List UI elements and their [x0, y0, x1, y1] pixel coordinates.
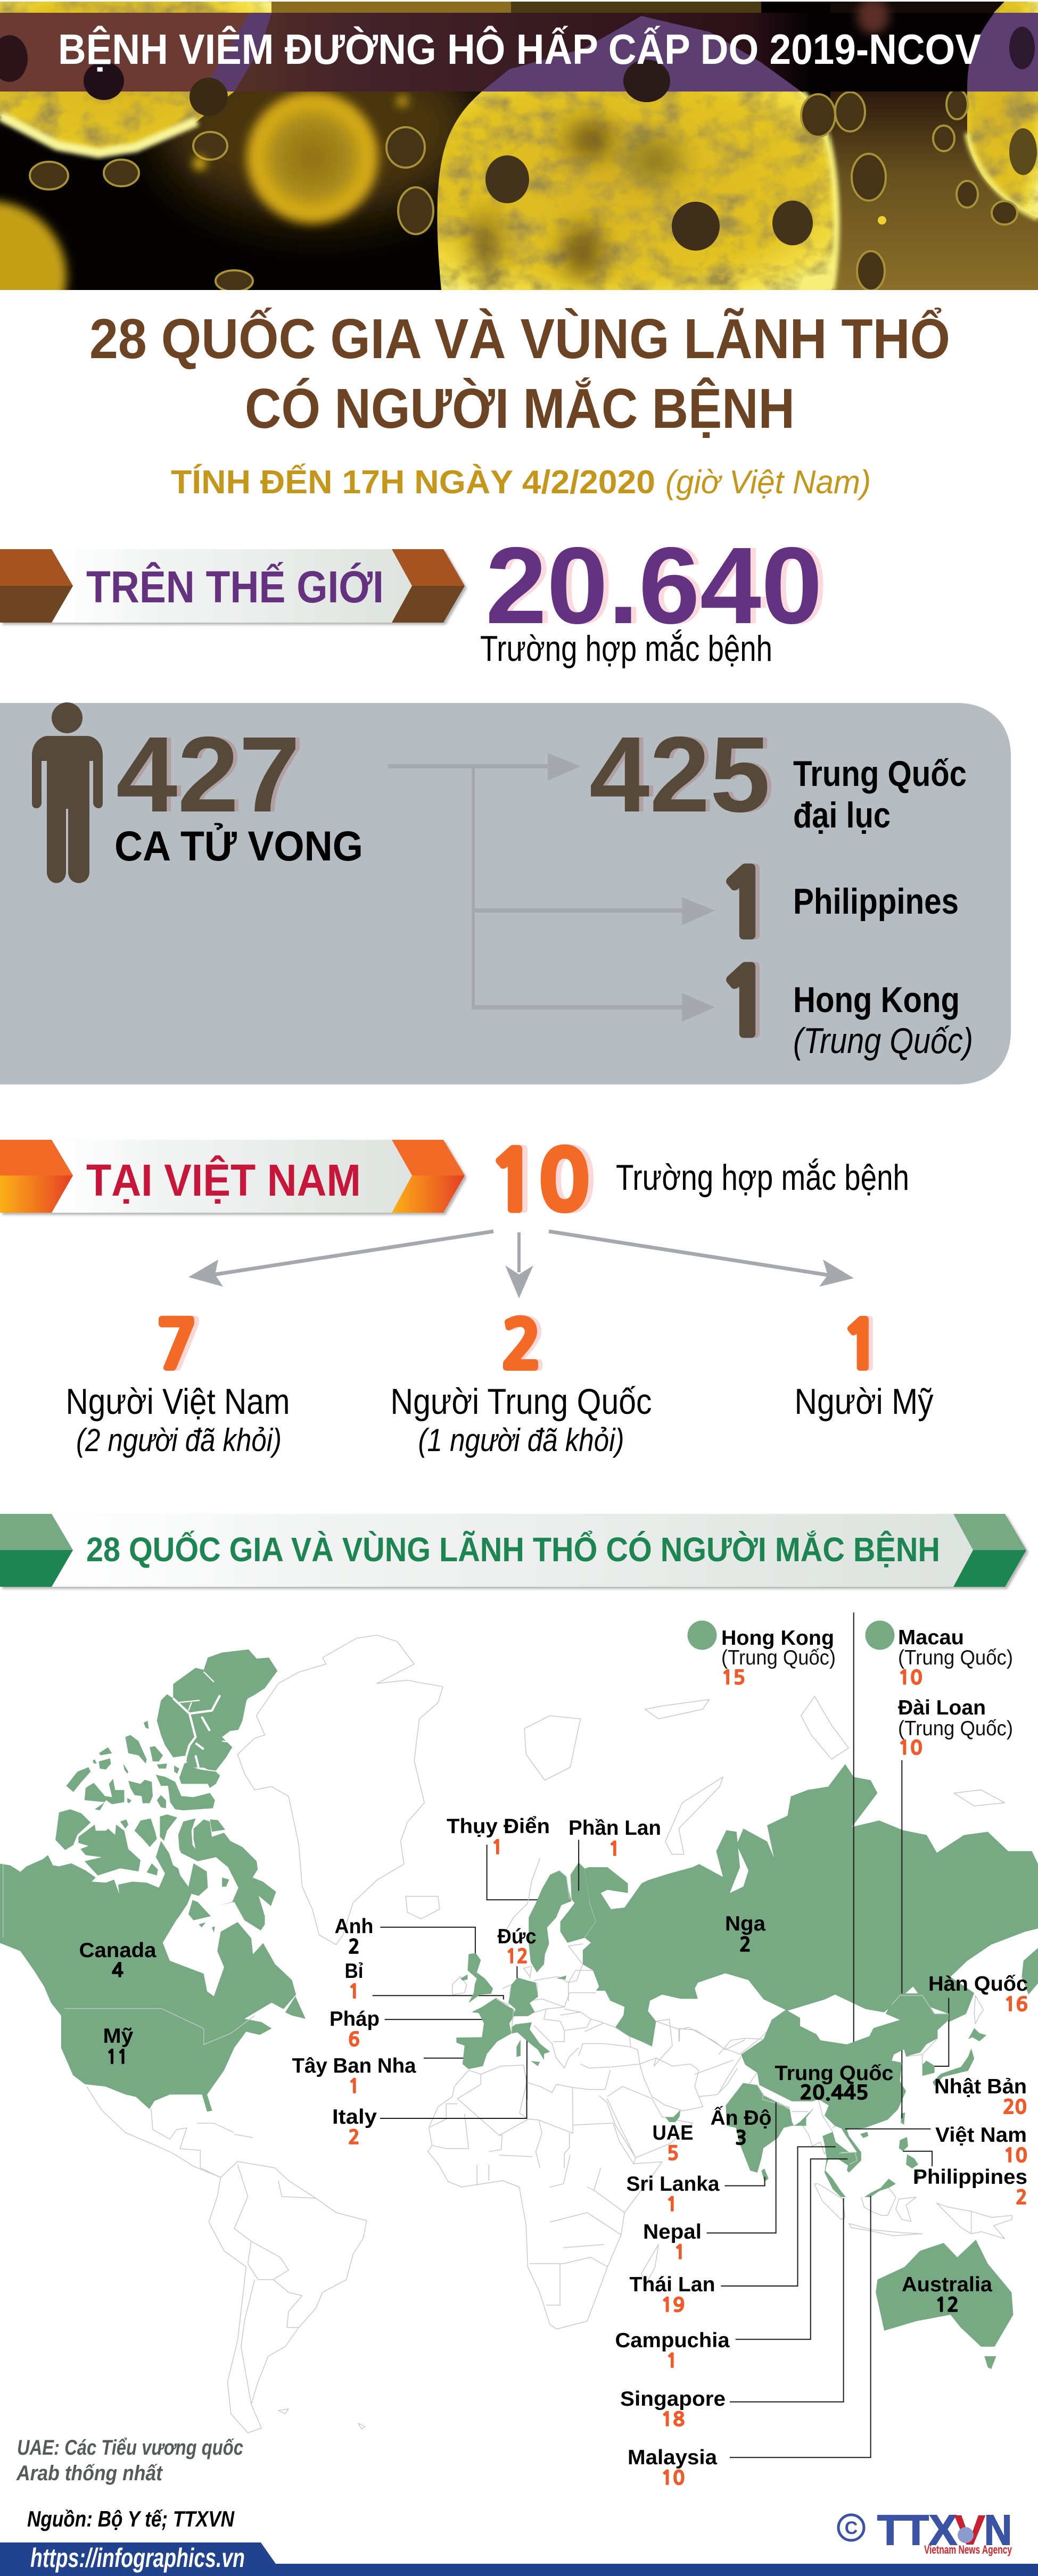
Hong Kong deaths: Hong Kong	[793, 980, 960, 1020]
leader lines: north and east	[579, 1612, 949, 2102]
map labels: Americas and Europe: 11	[106, 2048, 128, 2067]
map callout: Taiwan: Đài Loan	[898, 1696, 986, 1719]
Hong Kong deaths: (Trung Quốc)	[793, 1021, 973, 1061]
map labels: Americas and Europe: Phần Lan	[569, 1817, 661, 1840]
map labels: Americas and Europe: 1	[608, 1840, 620, 1859]
map labels: Americas and Europe: Tây Ban Nha	[292, 2055, 416, 2077]
map labels: Americas and Europe: Đức	[497, 1925, 537, 1948]
map callout: Hong Kong	[688, 1621, 836, 1687]
stat: Vietnamese patients: 7	[161, 1313, 202, 1378]
map labels: Asia and Oceania: 19	[661, 2296, 685, 2315]
footer bar	[0, 2542, 1038, 2576]
map labels: Americas and Europe: Pháp	[329, 2008, 380, 2031]
Hong Kong deaths: 1	[718, 957, 773, 1048]
map labels: Asia and Oceania: Singapore	[620, 2388, 726, 2411]
Vietnam total: 10	[488, 1141, 590, 1223]
map labels: Asia and Oceania: Sri Lanka	[626, 2173, 720, 2196]
logo: TTXVN	[838, 2506, 1012, 2556]
world total: 20.640	[485, 525, 822, 647]
mainland China deaths: đại lục	[793, 795, 891, 835]
note: UAE: Arab thống nhất	[16, 2462, 163, 2485]
ribbon: world: TRÊN THẾ GIỚI	[86, 562, 384, 612]
map labels: Americas and Europe: 6	[348, 2031, 360, 2049]
note: UAE	[16, 2436, 243, 2485]
map labels: Americas and Europe: Mỹ	[103, 2025, 134, 2048]
mainland China deaths	[589, 714, 967, 835]
map labels: Asia and Oceania: 2	[739, 1936, 751, 1954]
map labels: Americas and Europe: Anh	[334, 1915, 374, 1938]
map labels: Americas and Europe	[79, 1815, 661, 2147]
arrows: Vietnam breakdown	[188, 1231, 854, 1298]
map labels: Asia and Oceania: Philippines	[913, 2166, 1027, 2189]
map labels: Americas and Europe: Italy	[332, 2106, 377, 2128]
death total: 427	[116, 714, 300, 834]
stat: Chinese patients: Người Trung Quốc	[391, 1381, 652, 1422]
world map	[0, 1612, 1038, 2457]
logo: TTXVN: TTX	[877, 2506, 957, 2554]
Philippines deaths: 1	[718, 859, 773, 950]
map labels: Asia and Oceania: Nepal	[643, 2221, 702, 2243]
map labels: Asia and Oceania: Thái Lan	[629, 2273, 715, 2296]
note: UAE: UAE: Các Tiểu vương quốc	[17, 2436, 243, 2459]
stat: Chinese patients: 2	[506, 1313, 546, 1378]
map callout: Macau: Macau	[898, 1626, 964, 1649]
footer bar: https://infographics.vn	[30, 2543, 245, 2573]
map callout: Taiwan	[898, 1696, 1013, 1758]
main heading	[89, 308, 950, 440]
stat: American patient: 1	[845, 1313, 886, 1378]
ribbon: 28 countries	[0, 1514, 1026, 1587]
leader lines: Asia	[380, 2075, 932, 2457]
icon: person	[32, 702, 103, 883]
map labels: Americas and Europe: 2	[348, 1938, 360, 1957]
stat: American patient: 1	[841, 1313, 882, 1378]
ribbon: Vietnam	[0, 1140, 465, 1213]
main heading: CÓ NGƯỜI MẮC BỆNH	[245, 377, 795, 440]
logo: TTXVN: V	[954, 2506, 986, 2554]
map labels: Asia and Oceania: 20	[1003, 2098, 1027, 2117]
map labels: Asia and Oceania: Australia	[902, 2273, 992, 2296]
Philippines deaths: 1	[722, 859, 777, 950]
Philippines deaths: Philippines	[793, 881, 959, 922]
map labels: Asia and Oceania: 18	[661, 2411, 685, 2429]
map labels: Asia and Oceania: 12	[935, 2296, 959, 2315]
mainland China deaths: 425	[594, 714, 775, 834]
stat: Vietnamese patients: (2 người đã khỏi)	[76, 1422, 282, 1458]
date line: (giờ Việt Nam)	[665, 464, 871, 501]
map callout: Macau: (Trung Quốc)	[898, 1646, 1013, 1669]
map labels: Asia and Oceania: 10	[1003, 2147, 1027, 2165]
map labels: Americas and Europe: 1	[348, 2077, 360, 2096]
death total: 427	[120, 714, 304, 834]
Philippines deaths	[718, 859, 959, 950]
date line	[171, 464, 871, 501]
Hong Kong deaths: 1	[722, 957, 777, 1048]
world total: 20.640	[491, 525, 828, 647]
map labels: Americas and Europe: Thụy Điển	[447, 1815, 550, 1838]
stat: Chinese patients: (1 người đã khỏi)	[418, 1422, 624, 1458]
map labels: Asia and Oceania: 16	[1004, 1995, 1028, 2014]
map labels: Asia and Oceania: 1	[666, 2196, 678, 2214]
panel: deaths	[0, 702, 1011, 1084]
stat: Vietnamese patients: 7	[156, 1313, 197, 1378]
map labels: Asia and Oceania: 1	[666, 2352, 678, 2371]
leader lines: west	[373, 1845, 548, 2099]
map callout: Macau	[866, 1621, 1013, 1687]
map labels: Asia and Oceania	[615, 1912, 1028, 2488]
source: Nguồn: Bộ Y tế; TTXVN	[27, 2506, 235, 2531]
date line: TÍNH ĐẾN 17H NGÀY 4/2/2020	[171, 464, 655, 501]
map labels: Americas and Europe: 12	[506, 1948, 528, 1966]
map callout: Hong Kong: Hong Kong	[721, 1627, 834, 1650]
logo: TTXVN: N	[984, 2506, 1012, 2554]
map labels: Americas and Europe: Canada	[79, 1939, 156, 1962]
map callout: Hong Kong: 15	[721, 1669, 745, 1687]
map labels: Americas and Europe: 1	[491, 1838, 503, 1857]
map labels: Asia and Oceania: Việt Nam	[935, 2124, 1027, 2147]
stat: American patient	[794, 1313, 934, 1422]
map labels: Asia and Oceania: 2	[1016, 2189, 1027, 2207]
map callout: Hong Kong: (Trung Quốc)	[721, 1646, 836, 1669]
world total caption: Trường hợp mắc bệnh	[480, 628, 772, 669]
map labels: Asia and Oceania: Malaysia	[628, 2446, 717, 2469]
map labels: Americas and Europe: 1	[348, 1983, 360, 2001]
map labels: Asia and Oceania: 1	[674, 2243, 686, 2262]
mainland China deaths: 425	[589, 714, 770, 834]
logo: TTXVN: C	[845, 2518, 858, 2538]
arrows: death breakdown	[388, 753, 715, 1022]
map callout: Taiwan: 10	[898, 1739, 922, 1758]
Vietnam total: 10	[493, 1141, 595, 1223]
map callout: Macau: 10	[898, 1669, 922, 1687]
map labels: Asia and Oceania: Nhật Bản	[934, 2075, 1027, 2098]
map labels: Americas and Europe: 4	[112, 1961, 123, 1980]
map labels: Americas and Europe: 2	[348, 2128, 360, 2147]
map labels: Asia and Oceania: UAE	[653, 2122, 693, 2144]
map labels: Americas and Europe: Bỉ	[345, 1960, 363, 1983]
map labels: Asia and Oceania: Hàn Quốc	[928, 1973, 1028, 1995]
map labels: Asia and Oceania: 20.445	[800, 2084, 869, 2102]
death caption: CA TỬ VONG	[114, 822, 363, 869]
map labels: Asia and Oceania: Campuchia	[615, 2329, 730, 2352]
ribbon: world	[0, 549, 465, 623]
map callout: Taiwan: (Trung Quốc)	[898, 1717, 1013, 1740]
stat: Chinese patients	[391, 1313, 652, 1458]
mainland China deaths: Trung Quốc	[793, 753, 967, 794]
map labels: Asia and Oceania: 3	[735, 2129, 747, 2148]
Vietnam total caption: Trường hợp mắc bệnh	[616, 1157, 909, 1198]
map labels: Asia and Oceania: Nga	[725, 1912, 765, 1935]
map labels: Asia and Oceania: 10	[661, 2469, 685, 2488]
stat: Vietnamese patients	[66, 1313, 290, 1458]
stat: American patient: Người Mỹ	[794, 1381, 934, 1422]
ribbon: 28 countries: 28 QUỐC GIA VÀ VÙNG LÃNH THỔ CÓ NGƯỜI MẮC BỆNH	[86, 1530, 940, 1569]
stat: Vietnamese patients: Người Việt Nam	[66, 1381, 290, 1422]
Hong Kong deaths	[718, 957, 973, 1061]
stat: Chinese patients: 2	[501, 1313, 542, 1378]
main heading: 28 QUỐC GIA VÀ VÙNG LÃNH THỔ	[89, 308, 950, 370]
map labels: Asia and Oceania: Trung Quốc	[775, 2062, 893, 2085]
ribbon: Vietnam: TẠI VIỆT NAM	[86, 1155, 361, 1205]
map labels: Asia and Oceania: 5	[667, 2144, 679, 2163]
map labels: Asia and Oceania: Ấn Độ	[710, 2106, 772, 2130]
header image: virus cells	[0, 2, 1038, 290]
